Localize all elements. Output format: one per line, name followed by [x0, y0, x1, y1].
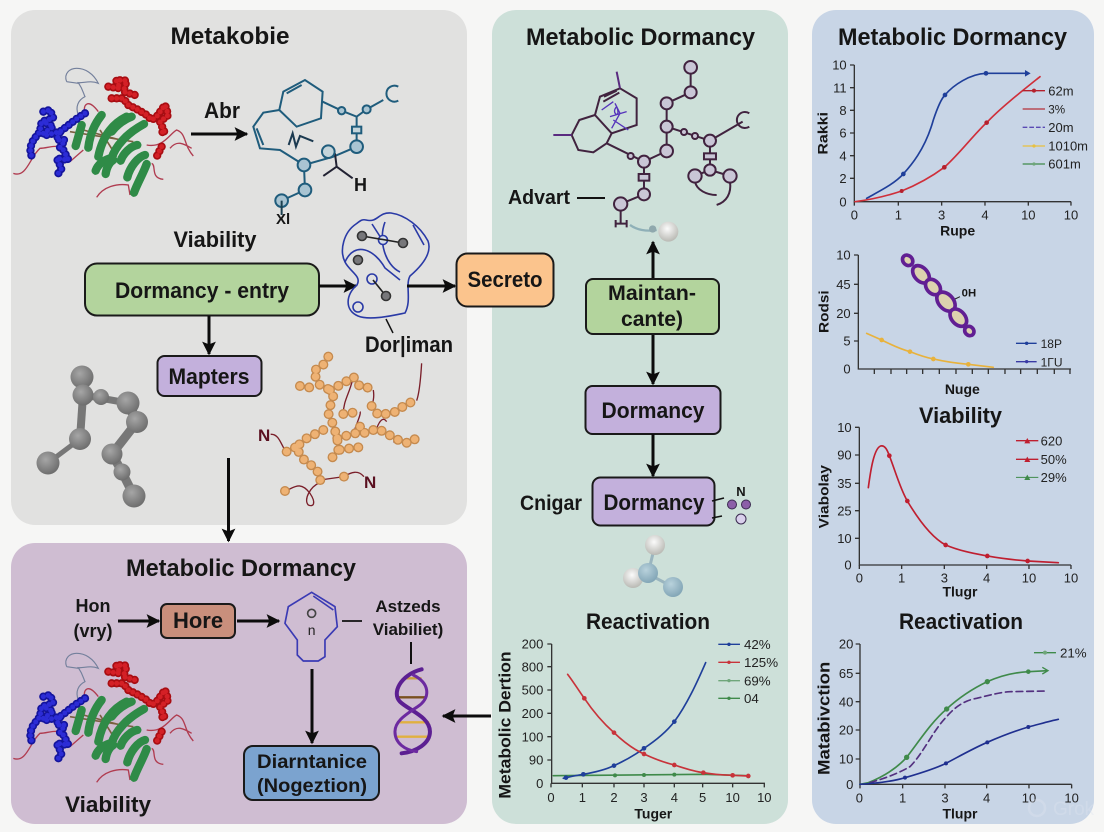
chart: Rakki vs Rupe: 4 [981, 207, 989, 222]
chart: Viabolay vs Tlugr: 0 [844, 558, 852, 573]
box: Diarntanice (Nogeztion) [244, 746, 379, 800]
arrow: protein to molecule [191, 132, 247, 136]
box: Dormancy - entry: Dormancy - entry [115, 278, 290, 303]
label: Astzeds Viabiliet): Astzeds [375, 597, 441, 616]
legend: 42% [744, 637, 771, 652]
chart: Matabivction vs Tlupr: 0 [846, 777, 853, 792]
panel: middle metabolic dormancy [492, 10, 788, 824]
chart: metabolic dertion: 0 [547, 790, 555, 805]
legend: 125% [744, 655, 778, 670]
legend: 62m [1048, 83, 1074, 98]
legend [1023, 83, 1088, 172]
legend [1016, 433, 1067, 485]
legend: 601m [1048, 157, 1081, 172]
arrow: blob to Secreto [407, 284, 455, 288]
chart: Matabivction vs Tlupr: Tlupr [943, 805, 978, 821]
box: Diarntanice (Nogeztion): (Nogeztion) [257, 775, 367, 797]
label: 0H: 0H [962, 288, 976, 300]
chart: metabolic dertion: 2 [610, 790, 618, 805]
icon: diagonal DNA [900, 253, 976, 338]
label: Viability: Viability [174, 227, 257, 252]
box: Dormancy lower: Dormancy [604, 490, 705, 515]
icon: folded chain blob [342, 213, 429, 318]
legend: 1010m [1048, 139, 1088, 154]
box: Secreto: Secreto [468, 267, 542, 292]
chart: Rakki vs Rupe: 0 [839, 194, 847, 209]
chart: Rodsi vs Nuge [816, 248, 1071, 397]
legend: 50% [1041, 452, 1067, 467]
heading: Metabolic Dormancy: Metabolic Dormancy [838, 24, 1068, 51]
box: Maintan-cante: cante) [621, 308, 683, 331]
chart: metabolic dertion: 90 [529, 753, 543, 768]
label: N right: N [364, 473, 376, 492]
chart: Viabolay vs Tlugr: 10 [1022, 571, 1036, 586]
box: Dormancy lower [592, 478, 714, 526]
box: Mapters: Mapters [168, 364, 250, 389]
icon: wine molecule [553, 61, 749, 242]
legend: 29% [1041, 470, 1067, 485]
label: Advart: Advart [508, 187, 570, 209]
connector: label to DNA [410, 642, 412, 664]
box: Dormancy - entry [85, 264, 319, 316]
heading: Metabolic Dormancy: Metabolic Dormancy [526, 24, 756, 51]
legend: 620 [1041, 433, 1062, 448]
chart: Viabolay vs Tlugr: 4 [983, 571, 990, 586]
box: Dormancy: Dormancy [602, 398, 705, 423]
box: Maintan-cante: Maintan- [608, 282, 696, 305]
label: Hon (vry): Hon [76, 596, 110, 616]
chart: Rakki vs Rupe: 6 [839, 126, 847, 141]
icon: N atoms [712, 484, 750, 524]
chart: metabolic dertion: 3 [640, 790, 648, 805]
chart: metabolic dertion: Tuger [634, 805, 673, 821]
chart: Rakki vs Rupe [815, 58, 1088, 238]
chart: Matabivction vs Tlupr: 20 [839, 723, 853, 738]
chart: Rakki vs Rupe: 2 [839, 171, 847, 186]
label: Advart [508, 187, 605, 209]
chart: metabolic dertion: 5 [699, 790, 706, 805]
heading: Reactivation: Reactivation [899, 609, 1023, 634]
chart: Rakki vs Rupe: Rakki [815, 112, 831, 155]
label: Astzeds Viabiliet): Viabiliet) [373, 620, 443, 639]
chart: Rakki vs Rupe: 3 [938, 207, 945, 222]
box: Hore [161, 604, 235, 638]
chart: Matabivction vs Tlupr: 10 [839, 752, 853, 767]
icon: protein structure [13, 68, 193, 197]
legend: 20m [1048, 120, 1074, 135]
box: Hore: Hore [173, 608, 223, 633]
label: Dorjiman: Dor|iman [365, 332, 453, 357]
chart: metabolic dertion: 800 [522, 659, 543, 674]
chart: Viabolay vs Tlugr: 10 [837, 420, 852, 435]
legend: 18P [1041, 337, 1062, 351]
chart: metabolic dertion: 1 [579, 790, 586, 805]
icon: DNA helix [395, 669, 430, 753]
watermark: Grok [1029, 799, 1095, 820]
legend: 1ΓU [1041, 355, 1063, 369]
icon: teal molecule [253, 80, 398, 215]
chart: Rodsi vs Nuge: 10 [836, 248, 851, 263]
arrow: Maintan-cante to Dormancy [652, 335, 654, 384]
chart: metabolic dertion: 100 [522, 729, 543, 744]
label: Cnigar: Cnigar [520, 492, 582, 515]
arrow: Hore to flask [237, 620, 279, 622]
chart: Viabolay vs Tlugr: Viabolay [816, 465, 832, 528]
chart: Viabolay vs Tlugr: 1 [898, 571, 905, 586]
arrow: Dormancy to Dormancy [652, 434, 654, 476]
chart: Matabivction vs Tlupr: Matabivction [814, 662, 833, 775]
chart: metabolic dertion [496, 637, 778, 821]
chart: metabolic dertion: 10 [757, 790, 772, 805]
chart: Rodsi vs Nuge: Rodsi [816, 290, 832, 333]
chart: Viabolay vs Tlugr: Tlugr [943, 584, 978, 600]
heading: Viability: Viability [919, 403, 1003, 428]
chart: Viabolay vs Tlugr: 10 [837, 531, 852, 546]
arrow: flask to Diarntanice [310, 669, 314, 743]
chart: Matabivction vs Tlupr: 1 [899, 790, 906, 805]
chart: Rakki vs Rupe: 1 [895, 207, 902, 222]
legend: 04 [744, 691, 759, 706]
chart: Viabolay vs Tlugr: 10 [1064, 571, 1078, 586]
heading: Reactivation: Reactivation [586, 609, 710, 634]
heading: Metabolic Dormancy: Metabolic Dormancy [126, 555, 357, 582]
panel: bottom left metabolic dormancy [11, 543, 467, 824]
arrow: entry to Mapters [208, 316, 210, 354]
chart: Rodsi vs Nuge: Nuge [945, 381, 980, 397]
chart: Matabivction vs Tlupr: 10 [1064, 790, 1079, 805]
chart: metabolic dertion: 0 [536, 776, 543, 791]
box: Dormancy [586, 386, 720, 434]
icon: orange bead chain [271, 357, 422, 506]
chart: Viabolay vs Tlugr: 0 [856, 571, 863, 586]
heading: Metakobie: Metakobie [170, 23, 290, 50]
chart: Matabivction vs Tlupr: 20 [839, 637, 853, 652]
icon: flask outline [285, 592, 337, 661]
chart: Matabivction vs Tlupr: 3 [941, 790, 949, 805]
chart: Matabivction vs Tlupr: 0 [856, 790, 863, 805]
chart: Rodsi vs Nuge: 45 [836, 277, 851, 292]
icon: protein structure [13, 653, 193, 782]
chart: metabolic dertion: 4 [671, 790, 678, 805]
legend [718, 637, 778, 706]
box: Maintan-cante [586, 279, 719, 334]
chart: Viabolay vs Tlugr [816, 420, 1078, 600]
icon: grey ball molecule [36, 366, 148, 508]
chart: Rakki vs Rupe: 10 [1021, 207, 1036, 222]
label: N left: N [258, 426, 270, 445]
label: Astzeds Viabiliet) [373, 597, 443, 639]
label: H: H [354, 175, 367, 195]
legend: 69% [744, 673, 771, 688]
chart: Viabolay vs Tlugr: 90 [837, 448, 852, 463]
chart: metabolic dertion: 500 [522, 683, 543, 698]
panel: top left metabolite panel [11, 10, 467, 525]
box: Mapters [158, 356, 262, 396]
watermark: Grok: Grok [1053, 799, 1095, 820]
box: Diarntanice (Nogeztion): Diarntanice [257, 751, 367, 773]
icon: ball molecule [623, 535, 683, 597]
arrow: top panel to bottom panel [227, 458, 230, 541]
label: Abr: Abr [204, 98, 240, 123]
chart: Rakki vs Rupe: Rupe [940, 222, 975, 238]
legend: 3% [1048, 104, 1065, 117]
label: Dorjiman [365, 319, 453, 357]
connector: entry to blob [319, 284, 356, 288]
label: Hon (vry) [73, 596, 113, 641]
chart: Rodsi vs Nuge: 0 [843, 362, 851, 377]
chart: Rakki vs Rupe: 0 [851, 207, 858, 222]
chart: metabolic dertion: 200 [522, 706, 543, 721]
arrow: chart to DNA [443, 714, 491, 718]
connector: flask to label [342, 620, 362, 622]
legend: 21% [1060, 646, 1087, 661]
chart: Matabivction vs Tlupr: 40 [839, 694, 853, 709]
chart: metabolic dertion: 10 [725, 790, 740, 805]
icon: flask outline: n [308, 622, 316, 638]
legend [1016, 337, 1063, 369]
chart: Matabivction vs Tlupr: 4 [983, 790, 990, 805]
legend [1034, 646, 1087, 661]
chart: Rakki vs Rupe: 8 [839, 103, 847, 118]
chart: Rakki vs Rupe: 10 [832, 58, 847, 73]
label: Viability: Viability [65, 792, 152, 817]
chart: Rakki vs Rupe: 4 [839, 148, 847, 163]
arrow: Hon to Hore [118, 620, 159, 622]
panel: right charts [812, 10, 1095, 824]
chart: metabolic dertion: Metabolic Dertion [496, 651, 515, 799]
icon: N atoms: N [736, 484, 746, 499]
label: Hon (vry): (vry) [73, 621, 113, 641]
box: Secreto [456, 254, 554, 306]
label: 0H [955, 288, 976, 300]
chart: Rakki vs Rupe: 11 [833, 80, 847, 95]
chart: Viabolay vs Tlugr: 3 [941, 571, 948, 586]
chart: Rodsi vs Nuge: 5 [843, 334, 851, 349]
chart: Rakki vs Rupe: 10 [1064, 207, 1078, 222]
chart: Matabivction vs Tlupr [814, 637, 1087, 821]
chart: Viabolay vs Tlugr: 35 [837, 476, 852, 491]
chart: Matabivction vs Tlupr: 65 [839, 666, 853, 681]
chart: Matabivction vs Tlupr: 10 [1022, 790, 1036, 805]
arrow: Maintan-cante up [652, 242, 654, 278]
label: Xl: Xl [276, 211, 290, 228]
chart: Viabolay vs Tlugr: 25 [837, 503, 852, 518]
chart: metabolic dertion: 200 [522, 637, 543, 652]
chart: Rodsi vs Nuge: 20 [836, 306, 851, 321]
